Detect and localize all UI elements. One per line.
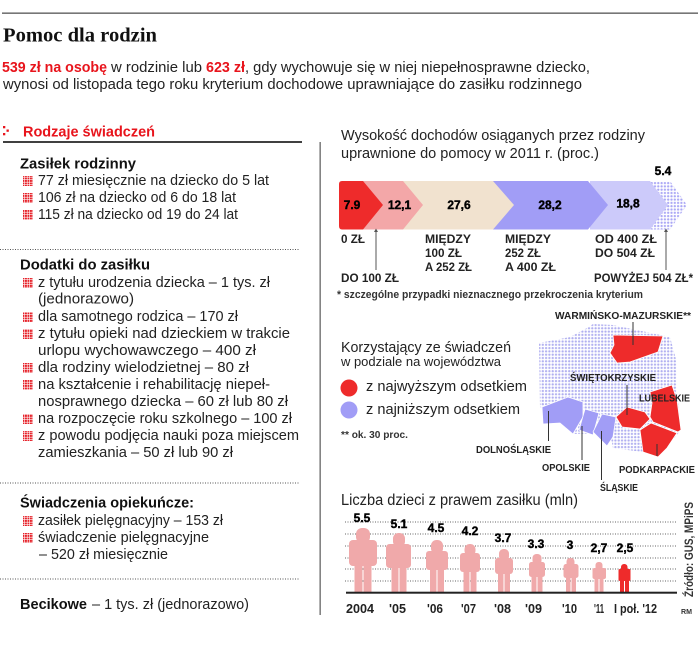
pictogram chart: 2,5 (617, 541, 634, 555)
block: dodatki do zasiłku: (jednorazowo) (38, 290, 134, 308)
footnote: * szczególne przypadki nieznacznego przekroczenia kryterium (337, 289, 643, 301)
bar labels: POWYŻEJ 504 ZŁ* (594, 272, 694, 285)
block: dodatki do zasiłku: urlopu wychowawczego – 400 zł (38, 342, 257, 359)
intro text: w rodzinie lub (110, 59, 202, 76)
pictogram chart: 2,7 (591, 541, 608, 555)
author initials: RM (681, 609, 692, 616)
subheading: w podziale na województwa (340, 355, 501, 369)
block: świadczenia opiekuńcze (20, 494, 224, 563)
bar labels: A 252 ZŁ (425, 262, 472, 274)
block: świadczenia opiekuńcze: zasiłek pielęgnacyjny – 153 zł (38, 512, 224, 529)
year axis: '10 (562, 601, 577, 616)
bar labels (341, 228, 694, 285)
map of Poland: LUBELSKIE (639, 392, 690, 404)
block: dodatki do zasiłku: dla rodziny wielodzietnej – 80 zł (38, 359, 250, 376)
pictogram chart: 5.5 (354, 511, 371, 525)
bar labels: DO 504 ZŁ (595, 248, 655, 260)
block: zasiłek rodzinny: Zasiłek rodzinny (20, 156, 137, 172)
bar labels: 0 ZŁ (341, 234, 365, 246)
intro text: wynosi od listopada tego roku kryterium dochodowe uprawniające do zasiłku rodzinnego (2, 76, 582, 93)
segmented arrow bar: 5.4 (655, 164, 672, 178)
map of Poland: DOLNOŚLĄSKIE (476, 443, 551, 456)
pictogram chart (345, 511, 677, 594)
bar labels: A 400 ZŁ (505, 262, 556, 274)
legend: najniższy: z najniższym odsetkiem (366, 401, 520, 418)
map of Poland (476, 309, 695, 494)
segmented arrow bar: 12,1 (388, 198, 412, 212)
intro text: 539 zł na osobę (2, 59, 107, 76)
year axis: '11 (594, 601, 604, 616)
block: zasiłek rodzinny: 115 zł na dziecko od 19 do 24 lat (38, 206, 239, 223)
segmented arrow bar: 27,6 (447, 198, 471, 212)
block: dodatki do zasiłku (20, 256, 299, 461)
year axis (346, 601, 657, 616)
pictogram chart: 4.5 (428, 521, 445, 535)
block: zasiłek rodzinny: 77 zł miesięcznie na dziecko do 5 lat (38, 172, 270, 189)
map of Poland: WARMIŃSKO-MAZURSKIE** (555, 309, 692, 322)
block: dodatki do zasiłku: Dodatki do zasiłku (20, 256, 150, 274)
panel: liczba dzieci (341, 492, 696, 616)
bar labels: 100 ZŁ (425, 248, 462, 260)
panel: wysokość dochodów (337, 127, 694, 301)
segmented arrow bar: 28,2 (538, 198, 562, 212)
legend: najwyższy: z najwyższym odsetkiem (366, 378, 527, 395)
block: dodatki do zasiłku: z tytułu urodzenia dziecka – 1 tys. zł (38, 274, 271, 291)
block: becikowe: Becikowe (20, 596, 87, 613)
year axis: I poł. '12 (614, 601, 657, 616)
block: becikowe: – 1 tys. zł (jednorazowo) (92, 596, 249, 613)
block: dodatki do zasiłku: zamieszkania – 50 zł lub 90 zł (38, 444, 234, 461)
block: zasiłek rodzinny: 106 zł na dziecko od 6 do 18 lat (38, 189, 237, 206)
pictogram chart: 5.1 (391, 517, 408, 531)
pictogram chart: 3.7 (495, 531, 512, 545)
block: dodatki do zasiłku: z powodu podjęcia nauki poza miejscem (38, 427, 299, 444)
panel: liczba dzieci: Liczba dzieci z prawem zasiłku (mln) (341, 492, 578, 509)
block: świadczenia opiekuńcze: – 520 zł miesięcznie (39, 546, 168, 563)
pictogram chart: 3.3 (528, 537, 545, 551)
block: dodatki do zasiłku: na kształcenie i rehabilitację niepeł- (38, 376, 270, 393)
year axis: '09 (525, 601, 542, 616)
block: dodatki do zasiłku: nosprawnego dziecka – 60 zł lub 80 zł (38, 393, 289, 410)
bar labels: 252 ZŁ (505, 248, 541, 260)
map of Poland: OPOLSKIE (542, 462, 590, 474)
year axis: '06 (427, 601, 443, 616)
block: dodatki do zasiłku: dla samotnego rodzica – 170 zł (38, 308, 239, 325)
block: becikowe (20, 596, 249, 613)
section heading: Rodzaje świadczeń (23, 124, 155, 140)
panel: korzystający ze świadczeń: Korzystający ze świadczeń (341, 339, 511, 356)
panel: rodzaje świadczeń (0, 124, 302, 613)
intro text: 623 zł (206, 59, 246, 76)
block: dodatki do zasiłku: z tytułu opieki nad dzieckiem w trakcie (38, 325, 290, 342)
intro text (2, 59, 590, 93)
block: świadczenia opiekuńcze: Świadczenia opiekuńcze: (20, 494, 194, 512)
intro text: , gdy wychowuje się w niej niepełnosprawne dziecko, (245, 59, 590, 76)
year axis: '07 (461, 601, 476, 616)
pictogram chart: 4.2 (462, 524, 479, 538)
bar labels: MIĘDZY (425, 234, 471, 246)
year axis: '05 (389, 601, 406, 616)
year axis: '08 (494, 601, 511, 616)
section marker (3, 126, 9, 135)
map of Poland: ŚLĄSKIE (600, 481, 638, 494)
block: zasiłek rodzinny (20, 156, 270, 223)
panel: wysokość dochodów: Wysokość dochodów osiąganych przez rodziny (341, 127, 645, 144)
title: Pomoc dla rodzin (3, 24, 157, 46)
subtitle: uprawnione do pomocy w 2011 r. (proc.) (341, 145, 599, 162)
year axis: 2004 (346, 601, 375, 616)
bar labels: OD 400 ZŁ (595, 234, 657, 246)
source: Źródło: GUS, MPiPS (681, 502, 696, 597)
map of Poland: ŚWIĘTOKRZYSKIE (570, 371, 656, 384)
segmented arrow bar: 18,8 (616, 196, 640, 210)
block: dodatki do zasiłku: na rozpoczęcie roku szkolnego – 100 zł (38, 410, 293, 427)
panel: korzystający ze świadczeń (340, 309, 695, 494)
bar labels: MIĘDZY (505, 234, 551, 246)
segmented arrow bar: 7.9 (344, 198, 361, 212)
bar labels: DO 100 ZŁ (341, 273, 399, 285)
note: ** ok. 30 proc. (341, 429, 408, 441)
segmented arrow bar (339, 164, 687, 230)
pictogram chart: 3 (567, 538, 574, 552)
block: świadczenia opiekuńcze: świadczenie pielęgnacyjne (38, 529, 209, 546)
